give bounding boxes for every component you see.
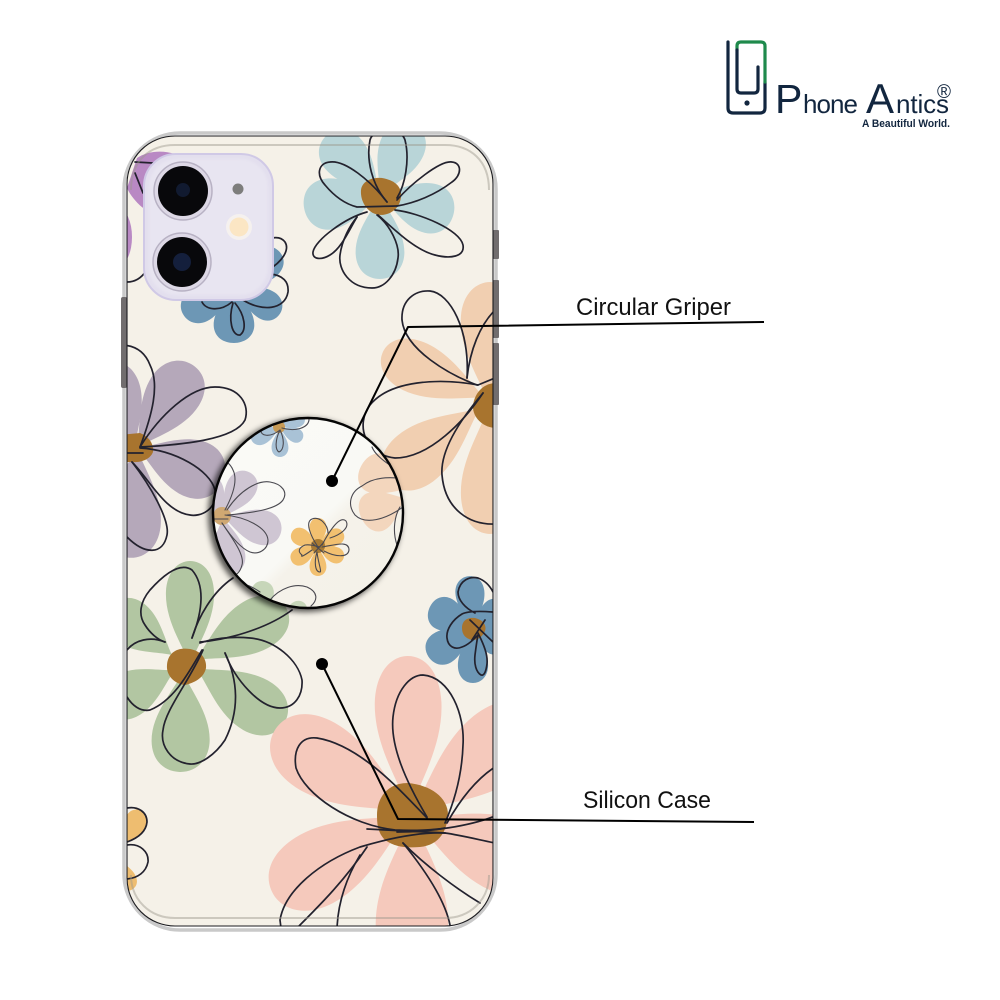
logo wordmark <box>775 75 951 130</box>
icon: phone <box>728 42 765 113</box>
logo wordmark: ® <box>937 82 951 103</box>
flower: peach right <box>362 282 492 534</box>
griper flower: green <box>248 581 316 607</box>
griper ring <box>213 418 403 608</box>
griper flower: peach <box>350 446 402 545</box>
flower: blue under camera <box>175 238 290 343</box>
callout: Silicon Case <box>316 658 754 822</box>
griper shadow <box>208 418 402 612</box>
callout: Circular Griper <box>326 294 764 487</box>
griper flower: orange <box>287 518 349 576</box>
flower: pink bottom <box>268 656 492 926</box>
camera lens top <box>154 162 212 220</box>
label case: Silicon Case <box>583 787 711 814</box>
flower: purple top left <box>128 152 172 283</box>
phone side buttons <box>121 230 499 405</box>
flower: orange bottom left <box>128 806 149 890</box>
flower: pale blue top <box>304 136 464 289</box>
leader dot griper <box>326 475 338 487</box>
flower: blue right <box>426 576 492 683</box>
logo wordmark: A <box>866 75 894 122</box>
griper disc <box>213 418 403 608</box>
leader dot case <box>316 658 328 670</box>
griper floral pattern <box>214 419 402 607</box>
logo wordmark: ntics <box>896 89 949 119</box>
griper flower: lavender <box>214 463 286 574</box>
silicon case outline <box>124 133 496 930</box>
flower: green <box>128 561 303 772</box>
case black edge line <box>127 136 493 926</box>
case back with floral pattern <box>128 136 492 926</box>
camera lens bottom <box>153 233 211 291</box>
product infographic <box>121 40 951 932</box>
label griper: Circular Griper <box>576 294 731 321</box>
leader line case <box>322 664 754 822</box>
circular griper <box>204 414 406 616</box>
logo: Phone Antics <box>728 42 951 130</box>
case inner edge shading <box>131 145 489 918</box>
camera bump <box>144 154 273 300</box>
leader line griper <box>332 322 764 481</box>
camera module <box>144 154 273 300</box>
camera bump inner highlight <box>149 159 268 295</box>
camera mic <box>232 184 244 194</box>
logo wordmark: hone <box>803 89 858 119</box>
camera flash <box>226 214 252 240</box>
logo wordmark: A Beautiful World. <box>862 118 950 130</box>
griper flower: blue <box>251 419 310 457</box>
flower: mauve left <box>128 344 248 558</box>
logo wordmark: P <box>775 76 802 122</box>
